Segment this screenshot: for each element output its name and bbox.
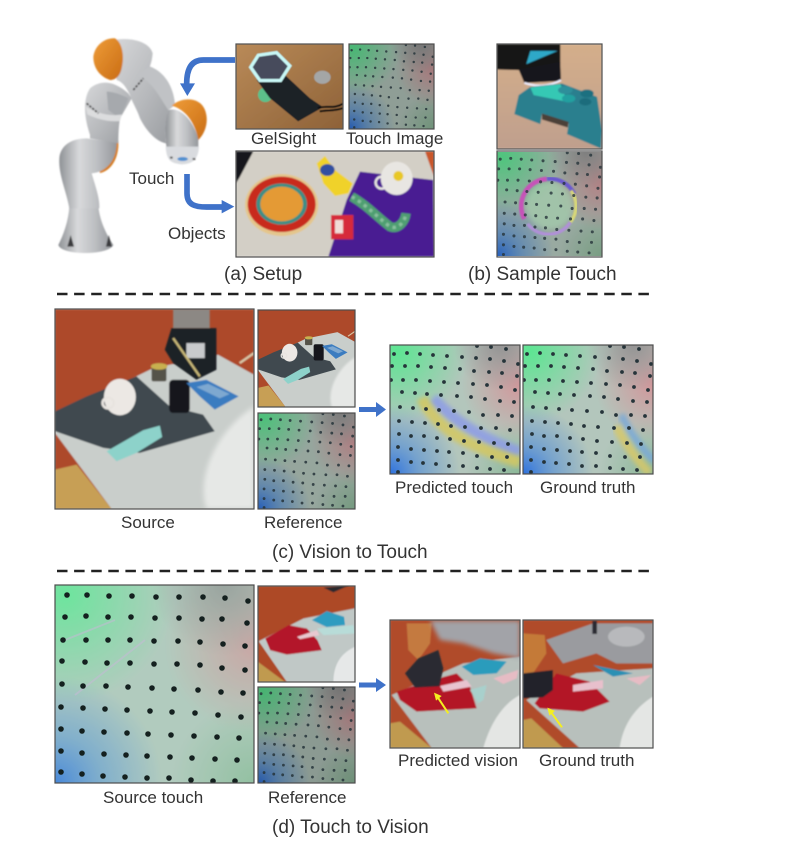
photo: GelSight sensor bbox=[236, 44, 342, 128]
image: ground truth touch bbox=[524, 346, 652, 474]
gripper bbox=[165, 309, 216, 380]
arrow bbox=[359, 402, 386, 417]
photo: source vision bbox=[56, 310, 254, 508]
frames bbox=[55, 585, 653, 783]
photo: reference vision bbox=[258, 586, 354, 682]
panel: (a) setup bbox=[58, 38, 443, 285]
image: reference touch bbox=[258, 414, 354, 508]
caption: (c) Vision to Touch: (c) Vision to Touch bbox=[272, 542, 428, 563]
image: predicted touch bbox=[390, 346, 520, 474]
panel: (d) touch to vision bbox=[55, 585, 653, 838]
label: GelSight: GelSight bbox=[251, 129, 316, 148]
label: Source touch: Source touch bbox=[103, 788, 203, 807]
label: Predicted vision: Predicted vision bbox=[398, 751, 518, 770]
frames bbox=[55, 309, 653, 509]
arrow: robot to objects bbox=[187, 174, 234, 213]
photo: reference vision bbox=[258, 310, 354, 406]
panel: (b) sample touch bbox=[468, 44, 617, 285]
label: Source: Source bbox=[121, 513, 175, 532]
icon: robot arm bbox=[58, 38, 207, 253]
label: Touch: Touch bbox=[129, 169, 174, 188]
panel: (c) vision to touch bbox=[55, 309, 655, 563]
arrow: GelSight to robot bbox=[180, 60, 235, 96]
caption: (b) Sample Touch: (b) Sample Touch bbox=[468, 264, 617, 285]
frames bbox=[236, 44, 434, 257]
arrow bbox=[359, 678, 386, 692]
fuzzy arm bbox=[430, 621, 520, 658]
label: Reference: Reference bbox=[268, 788, 346, 807]
caption: (d) Touch to Vision: (d) Touch to Vision bbox=[272, 817, 429, 838]
gripper bbox=[405, 650, 443, 687]
photo: ground truth vision bbox=[524, 620, 652, 748]
label: Touch Image: Touch Image bbox=[346, 129, 443, 148]
image: touch image bbox=[350, 44, 434, 128]
yellow arrow bbox=[547, 708, 562, 727]
label: Reference: Reference bbox=[264, 513, 342, 532]
label: Predicted touch: Predicted touch bbox=[395, 478, 513, 497]
yellow arrow bbox=[434, 693, 448, 713]
photo: sensor pressing brick bbox=[498, 44, 602, 148]
photo: predicted vision bbox=[390, 620, 520, 748]
frames bbox=[497, 44, 602, 257]
label: Ground truth: Ground truth bbox=[539, 751, 634, 770]
image: touch with ring contact bbox=[498, 152, 602, 256]
caption: (a) Setup: (a) Setup bbox=[224, 264, 302, 285]
image: source touch bbox=[56, 586, 254, 782]
photo: objects bbox=[236, 152, 434, 256]
label: Objects: Objects bbox=[168, 224, 226, 243]
dots bbox=[61, 595, 248, 781]
label: Ground truth: Ground truth bbox=[540, 478, 635, 497]
image: reference touch bbox=[258, 688, 354, 782]
